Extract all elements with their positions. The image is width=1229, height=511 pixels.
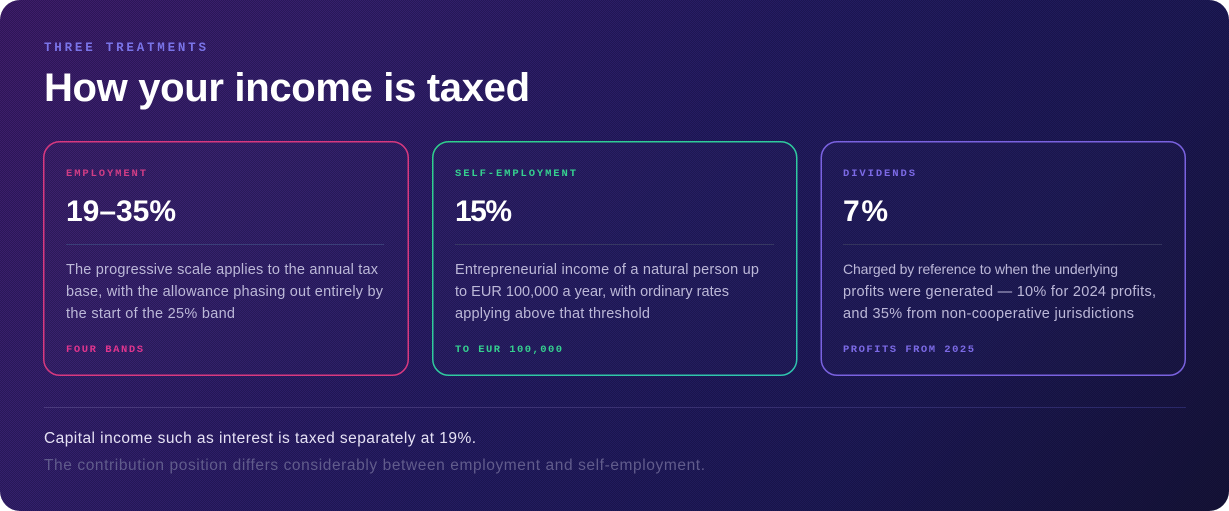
tag: to EUR 100,000: TO EUR 100,000 bbox=[455, 344, 562, 356]
label: self-employment: SELF-EMPLOYMENT bbox=[455, 168, 576, 180]
panel: employment bbox=[44, 142, 408, 375]
divider bbox=[66, 244, 384, 245]
description: self-employment: Entrepreneurial income of a natural person up bbox=[455, 262, 759, 278]
description: employment: base, with the allowance phasing out entirely by bbox=[66, 284, 384, 300]
footer note: capital income: Capital income such as interest is taxed separately at 19%. bbox=[44, 430, 476, 447]
rate: employment: 19–35% bbox=[66, 195, 176, 228]
tag: profits from 2025: PROFITS FROM 2025 bbox=[843, 344, 974, 356]
description: employment: the start of the 25% band bbox=[66, 306, 235, 322]
divider bbox=[455, 244, 774, 245]
panel: self-employment bbox=[433, 142, 797, 375]
label: employment: EMPLOYMENT bbox=[66, 168, 146, 180]
footer note: contribution position: The contribution position differs considerably between employment and self-employment. bbox=[44, 457, 705, 474]
description: dividends: and 35% from non-cooperative jurisdictions bbox=[843, 306, 1134, 322]
description: dividends: Charged by reference to when the underlying bbox=[843, 261, 1118, 277]
panel: dividends bbox=[821, 142, 1185, 375]
divider bbox=[843, 244, 1162, 245]
eyebrow: THREE TREATMENTS bbox=[44, 41, 206, 55]
rate: self-employment: 15% bbox=[455, 195, 512, 228]
label: dividends: DIVIDENDS bbox=[843, 168, 915, 180]
rate: dividends: 7% bbox=[843, 195, 888, 228]
description: employment bbox=[66, 262, 384, 322]
description: dividends bbox=[843, 261, 1156, 322]
description: self-employment: applying above that threshold bbox=[455, 306, 650, 322]
description: self-employment bbox=[455, 262, 759, 322]
description: employment: The progressive scale applies to the annual tax bbox=[66, 262, 379, 278]
title: How your income is taxed bbox=[44, 66, 530, 110]
footer divider bbox=[44, 407, 1186, 408]
description: self-employment: to EUR 100,000 a year, with ordinary rates bbox=[455, 284, 729, 300]
tag: four bands: FOUR BANDS bbox=[66, 344, 143, 356]
description: dividends: profits were generated — 10% for 2024 profits, bbox=[843, 284, 1156, 300]
